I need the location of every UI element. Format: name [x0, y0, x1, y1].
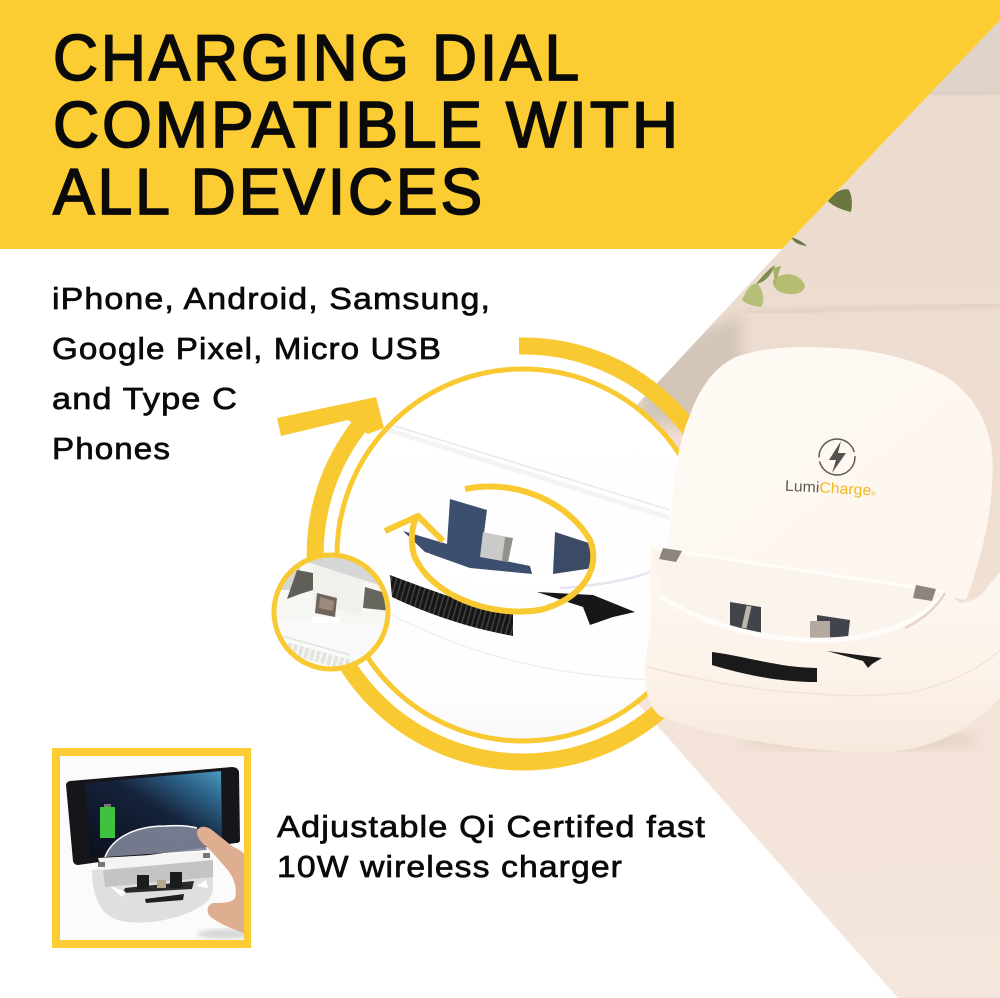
text block: compatible phones: iPhone, Android, Samsung, — [52, 281, 491, 316]
text block: compatible phones: Google Pixel, Micro USB — [52, 331, 442, 366]
icon: plant leaves — [742, 189, 852, 307]
text block: compatible phones — [52, 281, 491, 466]
panel: inset photo of phone on charger — [52, 748, 253, 948]
text block: wireless charger caption: 10W wireless charger — [277, 849, 623, 884]
charger dial — [390, 575, 513, 636]
title banner — [0, 0, 1000, 249]
charger — [92, 852, 213, 923]
panel: zoomed charger detail circle — [334, 366, 680, 744]
photo background: diagonal wall and table — [637, 20, 1000, 998]
panel: connector close-up circle — [270, 550, 395, 669]
arrow: outer rotation arc — [277, 346, 731, 762]
lens — [105, 826, 207, 857]
text block: compatible phones: Phones — [52, 431, 171, 466]
dial — [712, 652, 817, 682]
LumiCharge logo: LumiCharge ® — [785, 478, 877, 499]
charger base — [645, 545, 1000, 753]
heading — [53, 21, 681, 228]
charging slots — [730, 602, 850, 638]
text block: compatible phones: and Type C — [52, 381, 238, 416]
hand — [197, 827, 246, 934]
text block: wireless charger caption: Adjustable Qi Certifed fast — [277, 809, 706, 844]
panel: main charger product — [645, 347, 1000, 753]
LumiCharge logo — [785, 439, 877, 499]
charger back plate — [668, 347, 993, 600]
charging connector slots — [403, 499, 595, 574]
hinges — [659, 548, 682, 562]
phone — [66, 767, 240, 865]
text block: wireless charger caption — [277, 809, 706, 884]
arrow: inner rotation arrow — [385, 487, 593, 612]
heading: COMPATIBLE WITH — [53, 88, 681, 161]
heading: CHARGING DIAL — [53, 21, 582, 94]
clear lens cradle — [653, 549, 945, 640]
heading: ALL DEVICES — [53, 155, 485, 228]
